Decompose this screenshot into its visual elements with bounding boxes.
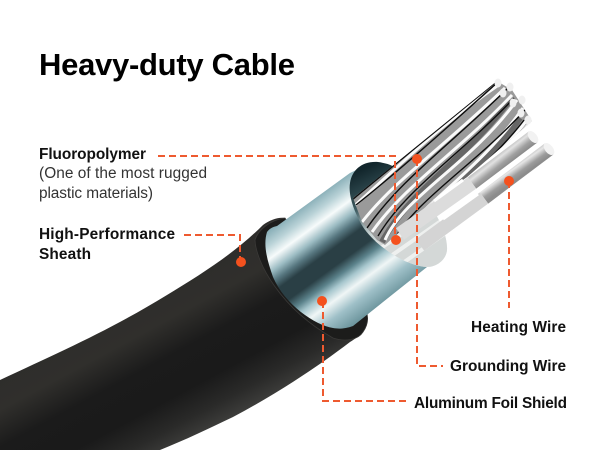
title: Heavy-duty Cable [39,47,295,82]
aluminum foil shield [265,162,427,329]
callout: heating wire: Heating Wire [471,319,566,336]
callout: fluoropolymer [39,146,401,245]
grounding wire [400,129,540,234]
callout: sheath: High-Performance [39,226,175,243]
black sheath [0,218,366,450]
callout: grounding wire [412,154,566,375]
insulated liner [375,217,447,267]
heating wire [420,141,556,245]
cable illustration [0,70,556,450]
callout: fluoropolymer: plastic materials) [39,185,153,202]
strand ends [494,78,532,124]
callout: sheath [39,226,246,267]
callout: fluoropolymer: Fluoropolymer [39,146,146,163]
conductor strands [353,83,532,245]
callout: grounding wire: Grounding Wire [450,358,566,375]
foil opening [350,162,447,267]
callout: heating wire [471,176,566,336]
callout: sheath: Sheath [39,246,91,263]
callout: fluoropolymer: (One of the most rugged [39,165,207,182]
callout: aluminum foil shield: Aluminum Foil Shield [414,395,567,412]
callout: aluminum foil shield [317,296,567,412]
